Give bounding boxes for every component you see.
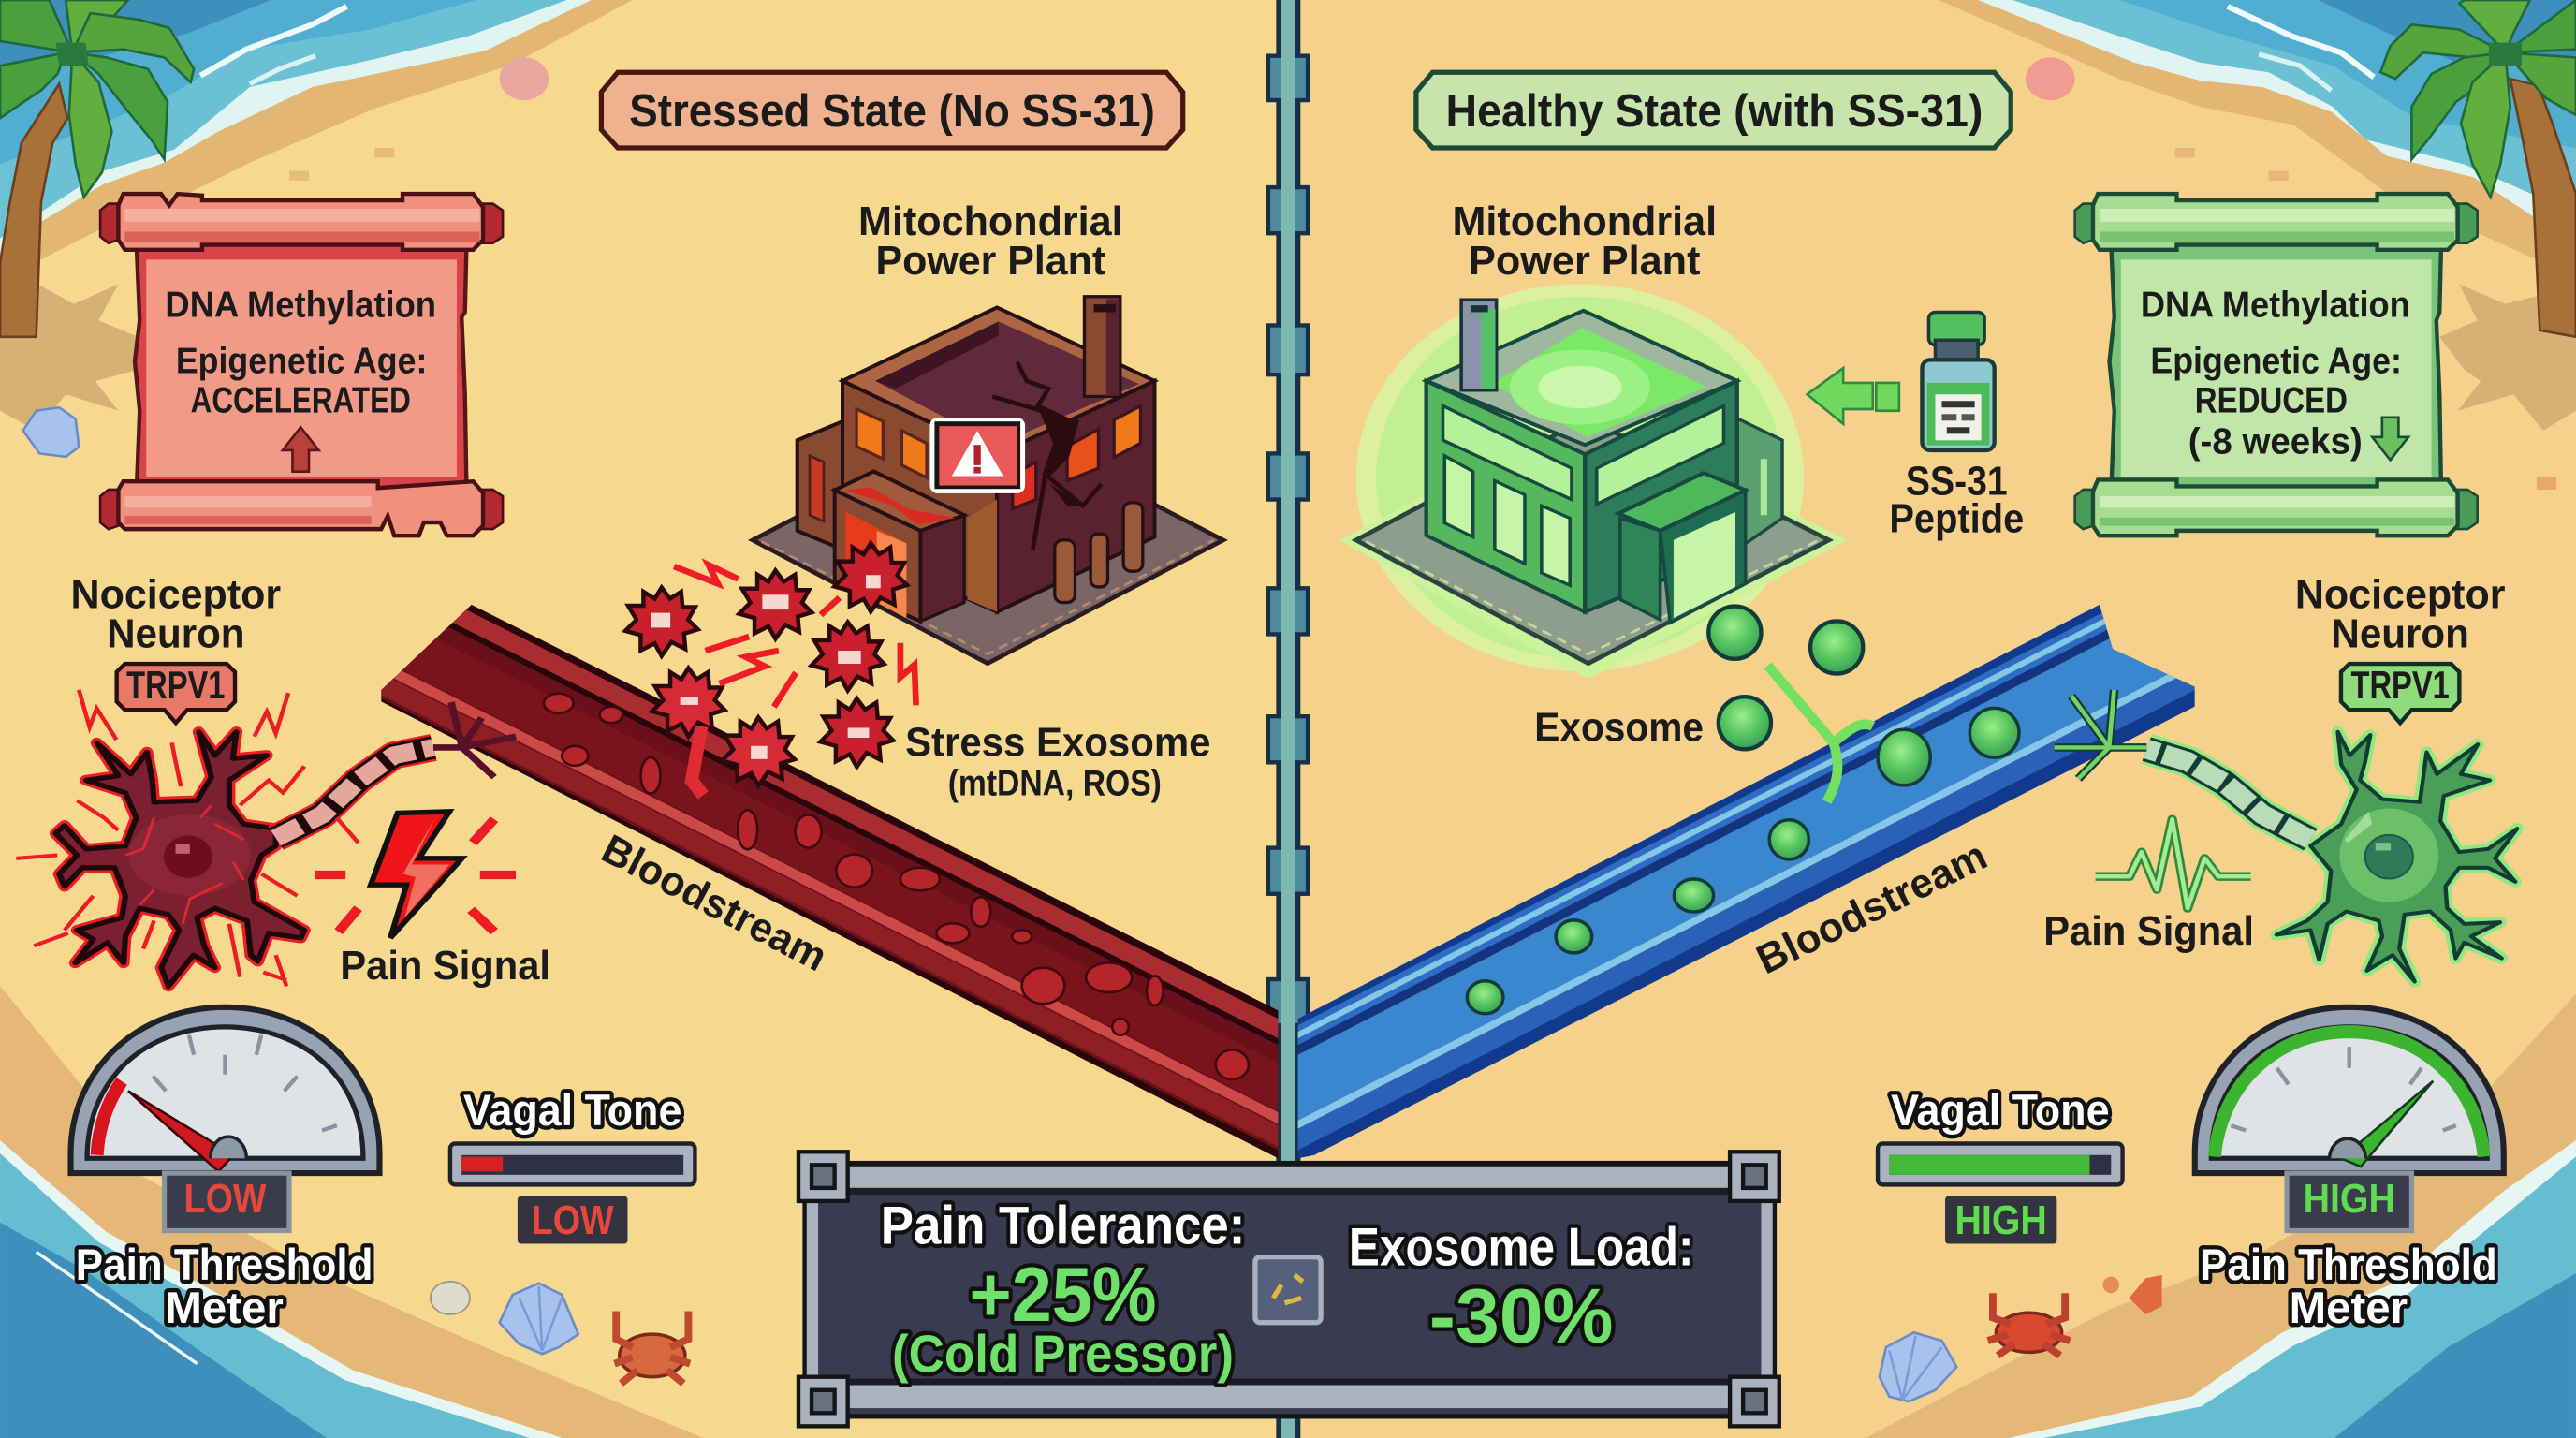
sparks — [16, 690, 359, 987]
chart element: red bloodstream channel — [381, 605, 1279, 1158]
palm tree shadow left — [0, 285, 138, 431]
label: stress exosome: (mtDNA, ROS) — [948, 763, 1162, 803]
axon — [2146, 749, 2310, 840]
label: pain threshold meter, healthy — [2200, 1240, 2497, 1333]
LOW badge: LOW — [184, 1176, 267, 1222]
label: mitochondrial power plant, stressed: Mitochondrial — [858, 198, 1123, 244]
icon: pain signal bolt — [315, 812, 516, 938]
blue shell left — [500, 1284, 578, 1354]
icon: healthy glowing factory — [1339, 284, 1848, 679]
scroll text: DNA Methylation — [2141, 286, 2410, 326]
HIGH badge: HIGH — [2304, 1176, 2395, 1222]
meter: pain threshold, stressed — [71, 1007, 379, 1231]
vagal tone bar, healthy: Vagal Tone — [1891, 1086, 2110, 1136]
axon terminal — [433, 702, 516, 777]
beach: top-left ocean — [0, 0, 633, 287]
label: mitochondrial power plant, healthy: Mitochondrial — [1453, 198, 1717, 244]
needle — [128, 1091, 233, 1171]
bottom decorations: shells and crabs — [431, 1275, 2162, 1401]
needle — [2341, 1081, 2433, 1167]
heading: stressed state — [601, 72, 1183, 148]
corner bolts — [798, 1152, 1779, 1426]
label: nociceptor neuron, healthy — [2295, 571, 2505, 656]
vagal tone bar, stressed — [450, 1086, 695, 1244]
icon: arrow down — [2372, 418, 2408, 460]
spark bolts — [674, 565, 916, 707]
panel: DNA methylation scroll, stressed: Epigenetic Age: — [176, 341, 427, 381]
LOW badge — [165, 1173, 289, 1231]
label: pain threshold meter, stressed: Pain Threshold — [76, 1240, 373, 1290]
label: pain threshold meter, stressed: Meter — [165, 1284, 284, 1333]
panel: DNA methylation scroll, healthy: Epigenetic Age: — [2150, 341, 2402, 381]
stat: pain tolerance: +25% — [970, 1252, 1157, 1338]
tag: TRPV1 healthy: TRPV1 — [2351, 663, 2450, 707]
crab left — [614, 1312, 690, 1384]
label: ss-31 peptide — [1889, 458, 2024, 542]
tag: TRPV1 stressed — [117, 663, 235, 723]
panel: DNA methylation scroll, healthy: REDUCED — [2195, 381, 2348, 421]
label: nociceptor neuron, healthy: Nociceptor — [2295, 571, 2505, 617]
heading: healthy state — [1416, 72, 2011, 148]
central divider — [1268, 0, 1308, 1438]
icon: healthy neuron — [2055, 690, 2517, 982]
label: exosome: Exosome — [1534, 705, 1704, 751]
panel: DNA methylation scroll, healthy: (-8 weeks) — [2188, 421, 2363, 462]
heading: stressed state: Stressed State (No SS-31) — [629, 86, 1155, 137]
blue shell right — [1880, 1332, 1956, 1401]
green arc — [2215, 1032, 2484, 1157]
stat: pain tolerance — [881, 1196, 1245, 1383]
vagal tone bar, stressed: Vagal Tone — [463, 1086, 681, 1136]
LOW badge: LOW — [532, 1197, 614, 1243]
label: pain signal healthy: Pain Signal — [2043, 908, 2254, 954]
green exosome trail — [1767, 666, 1873, 801]
vagal tone bar, healthy — [1878, 1086, 2123, 1244]
white glyph marks on exosomes — [651, 575, 881, 759]
top roller — [2075, 194, 2478, 250]
label: mitochondrial power plant, stressed — [858, 198, 1123, 284]
label: bloodstream right: Bloodstream — [1749, 832, 1994, 983]
stress exosomes with red sparks — [625, 543, 916, 795]
healthy exosomes leaving factory — [1708, 607, 1863, 749]
label: pain threshold meter, healthy: Pain Threshold — [2200, 1240, 2497, 1290]
top roller — [100, 194, 503, 250]
red arc — [97, 1081, 122, 1155]
tag: TRPV1 healthy — [2341, 663, 2459, 723]
palm tree right — [2380, 0, 2576, 337]
stat: pain tolerance: (Cold Pressor) — [892, 1324, 1234, 1383]
tag: TRPV1 stressed: TRPV1 — [126, 663, 225, 707]
arrow: ss-31 into factory — [1808, 368, 1899, 424]
label: mitochondrial power plant, stressed: Power Plant — [875, 238, 1106, 284]
icon: arrow up — [283, 427, 319, 472]
panel: DNA methylation scroll, stressed — [100, 194, 503, 536]
gauge ticks — [2231, 1047, 2456, 1130]
beach: bottom-left ocean — [0, 986, 707, 1438]
gauge ticks — [153, 1035, 337, 1130]
beach: bottom-right ocean — [1863, 994, 2576, 1438]
label: bloodstream left: Bloodstream — [594, 826, 834, 980]
blood cells in red channel — [544, 694, 1249, 1079]
palm tree left — [0, 0, 194, 337]
stat: exosome load: Exosome Load: — [1349, 1217, 1693, 1277]
icon: center badge — [1255, 1257, 1321, 1323]
panel: DNA methylation scroll, stressed: ACCELERATED — [191, 381, 411, 421]
label: nociceptor neuron, stressed — [71, 571, 281, 656]
heading: healthy state: Healthy State (with SS-31) — [1445, 86, 1983, 137]
label: pain signal stressed: Pain Signal — [340, 943, 550, 989]
label: mitochondrial power plant, healthy: Power Plant — [1469, 238, 1701, 284]
label: pain threshold meter, stressed — [76, 1240, 373, 1333]
bottom roller — [100, 481, 503, 536]
scroll text: DNA Methylation — [165, 286, 436, 326]
label: mitochondrial power plant, healthy — [1453, 198, 1717, 284]
panel: DNA methylation scroll, healthy — [2075, 194, 2478, 536]
HIGH badge — [2287, 1173, 2411, 1231]
label: stress exosome: Stress Exosome — [905, 719, 1211, 765]
label: pain threshold meter, healthy: Meter — [2290, 1284, 2408, 1333]
label: stress exosome — [905, 719, 1211, 803]
crab right — [1988, 1293, 2070, 1356]
meter: pain threshold, healthy — [2195, 1007, 2504, 1231]
axon terminal — [2055, 690, 2146, 779]
icon: stressed neuron — [16, 690, 516, 987]
label: ss-31 peptide: Peptide — [1889, 496, 2024, 542]
beach: top-right ocean — [1939, 0, 2576, 287]
shells and sand decorations top — [23, 57, 2556, 490]
label: ss-31 peptide: SS-31 — [1906, 458, 2008, 504]
label: nociceptor neuron, stressed: Nociceptor — [71, 571, 281, 617]
label: nociceptor neuron, healthy: Neuron — [2331, 610, 2469, 656]
chart element: blue bloodstream channel — [1297, 605, 2195, 1159]
icon: ss-31 vial — [1922, 312, 1995, 450]
bottom roller — [2075, 479, 2478, 536]
stat: exosome load: -30% — [1429, 1273, 1613, 1359]
stat: pain tolerance: Pain Tolerance: — [881, 1196, 1245, 1256]
stat: exosome load — [1349, 1217, 1693, 1359]
palm tree shadow right — [2439, 285, 2576, 431]
icon: damaged factory — [753, 297, 1223, 664]
exosomes in blue channel — [1467, 708, 2019, 1014]
icon: calm pulse line — [2096, 819, 2251, 908]
label: nociceptor neuron, stressed: Neuron — [107, 610, 245, 656]
HIGH badge: HIGH — [1955, 1197, 2047, 1243]
icon: warning badge — [929, 418, 1025, 493]
panel: results — [798, 1152, 1779, 1426]
axon — [276, 747, 433, 838]
